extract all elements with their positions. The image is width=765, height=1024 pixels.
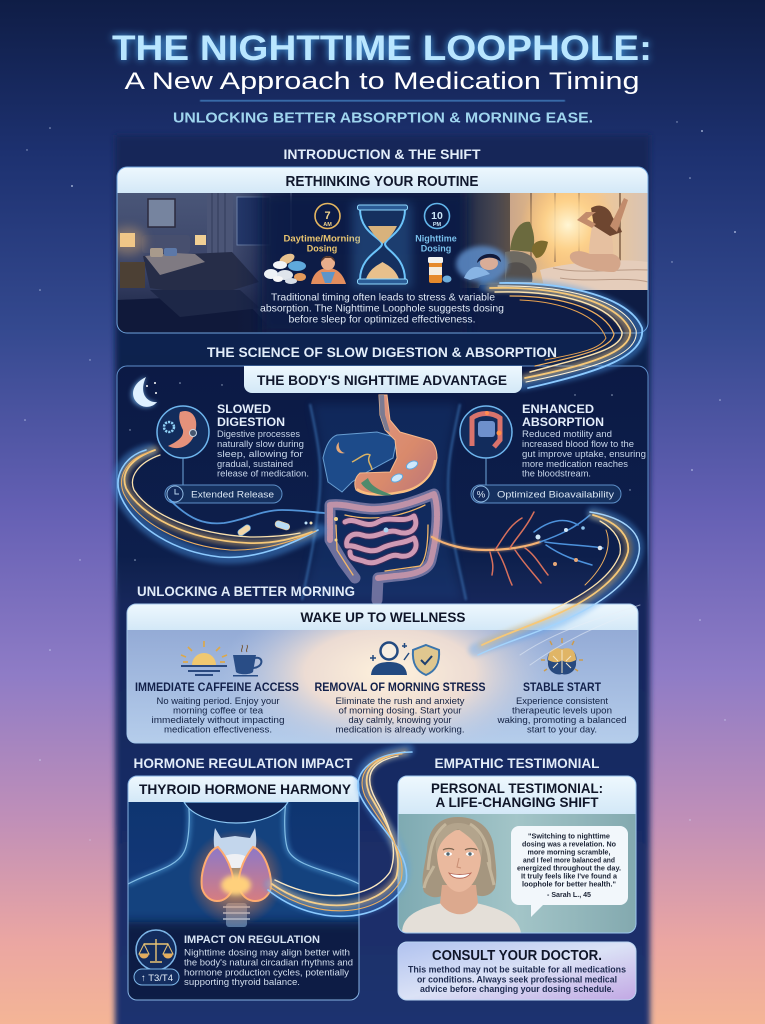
- icon: sleeping person: [456, 246, 508, 282]
- pill: optimized bioavailability: Optimized Bioavailability: [497, 490, 614, 500]
- anatomy: liver: [323, 432, 397, 492]
- body: slowed digestion: [217, 429, 309, 478]
- body silhouette: [302, 404, 466, 600]
- illustration: bedroom: [110, 193, 292, 333]
- energy swirl: thyroid to testimonial: [268, 750, 412, 916]
- speech bubble: and I feel more balanced and: [523, 856, 615, 864]
- body: impact on regulation: [184, 948, 353, 988]
- icon: pile of pills: [264, 252, 306, 284]
- panel: rethinking your routine: [110, 167, 648, 333]
- panel header: THYROID HORMONE HARMONY: [139, 781, 352, 797]
- panel: consult your doctor: [398, 942, 636, 1000]
- illustration: thyroid gland: [188, 828, 284, 927]
- item: stable start: STABLE START: [523, 682, 601, 694]
- body: impact on regulation: the body's natural circadian rhythms and: [184, 958, 353, 968]
- pill: extended release: Extended Release: [191, 490, 274, 500]
- section label: science: THE SCIENCE OF SLOW DIGESTION & ABSORPTION: [207, 345, 557, 360]
- pill: extended release: [165, 485, 282, 503]
- speech bubble: "Switching to nighttime: [528, 832, 610, 840]
- icon: calm person: [370, 642, 409, 675]
- intro body text: [260, 292, 504, 326]
- panel: consult your doctor: CONSULT YOUR DOCTOR.: [432, 948, 602, 964]
- label: nighttime dosing: [415, 234, 457, 254]
- slowed digestion callout: [157, 404, 309, 503]
- label: nighttime dosing: Nighttime: [415, 234, 457, 244]
- section label: unlocking a better morning: UNLOCKING A BETTER MORNING: [137, 584, 355, 599]
- icon: coffee cup: [233, 645, 261, 676]
- item: removal of morning stress: of morning dosing. Start your: [338, 706, 462, 716]
- icon: 10 pm clock: PM: [433, 222, 442, 228]
- body: enhanced absorption: [522, 429, 646, 478]
- vessels: [432, 512, 603, 585]
- tagline: UNLOCKING BETTER ABSORPTION & MORNING EASE.: [173, 110, 593, 126]
- dark floor under the swirl: [478, 284, 574, 290]
- icon: shield with check: [413, 645, 439, 675]
- panel: consult your doctor: advice before changing your dosing schedule.: [420, 984, 614, 994]
- body: slowed digestion: Digestive processes: [217, 429, 301, 439]
- body: impact on regulation: hormone production cycles, potentially: [184, 968, 349, 978]
- illustration: sunrise bedroom: [462, 193, 648, 290]
- item: stable start: [496, 682, 626, 734]
- panel header: PERSONAL TESTIMONIAL:: [431, 780, 603, 796]
- icon: 10 pm clock: 10: [431, 210, 443, 222]
- section label: empathic testimonial: EMPATHIC TESTIMONIAL: [434, 756, 600, 771]
- enhanced absorption callout: [460, 404, 646, 503]
- connector: [182, 458, 184, 485]
- photo: smiling woman: [402, 817, 521, 933]
- body: slowed digestion: release of medication.: [217, 468, 309, 478]
- item: stable start: Experience consistent: [516, 696, 608, 706]
- panel header: WAKE UP TO WELLNESS: [300, 609, 466, 625]
- heading: slowed digestion: [217, 404, 285, 429]
- item: removal of morning stress: medication is already working.: [336, 724, 464, 734]
- intro body text: Traditional timing often leads to stress & variable: [271, 292, 495, 304]
- item: immediate caffeine access: immediately without impacting: [152, 715, 284, 725]
- section label: hormone regulation impact: HORMONE REGULATION IMPACT: [134, 756, 353, 771]
- icon: crescent moon: [131, 377, 157, 407]
- panel border: [117, 167, 648, 333]
- body: enhanced absorption: gut improve uptake, ensuring: [522, 449, 646, 459]
- item: removal of morning stress: REMOVAL OF MORNING STRESS: [314, 682, 486, 694]
- heading: enhanced absorption: [522, 404, 604, 429]
- heading: enhanced absorption: ABSORPTION: [522, 417, 604, 429]
- intro body text: before sleep for optimized effectiveness.: [288, 314, 476, 326]
- panel header: [128, 776, 359, 802]
- pill: T3/T4: [134, 969, 179, 985]
- panel header: [398, 776, 636, 814]
- item: stable start: start to your day.: [527, 724, 597, 734]
- icon: 10 pm clock: [424, 204, 450, 228]
- body: impact on regulation: supporting thyroid balance.: [184, 977, 300, 988]
- body: impact on regulation: Nighttime dosing may align better with: [184, 948, 350, 958]
- icon: intestine: [460, 406, 512, 458]
- section label: introduction: INTRODUCTION & THE SHIFT: [284, 147, 481, 162]
- label: daytime dosing: [284, 234, 360, 254]
- starfield: [24, 121, 736, 841]
- heading: slowed digestion: DIGESTION: [217, 417, 285, 429]
- icon: stomach with gear: [157, 406, 209, 458]
- section header pill: the body's nighttime advantage: [244, 366, 522, 393]
- item: stable start: waking, promoting a balanced: [496, 715, 626, 725]
- item: removal of morning stress: [314, 682, 486, 734]
- item: immediate caffeine access: [135, 682, 299, 734]
- body: enhanced absorption: the bloodstream.: [522, 468, 591, 478]
- panel header: RETHINKING YOUR ROUTINE: [286, 174, 479, 190]
- icon: pill bottle: [428, 257, 452, 283]
- connector: [485, 458, 487, 485]
- item: stable start: therapeutic levels upon: [512, 706, 612, 716]
- panel: body's nighttime advantage: [117, 366, 648, 604]
- body: slowed digestion: sleep, allowing for: [217, 449, 303, 459]
- illustration: neck: [128, 802, 358, 956]
- illustration: central shade: [262, 193, 467, 333]
- panel: thyroid hormone harmony: [120, 776, 370, 1007]
- speech bubble: It truly feels like I've found a: [521, 872, 618, 880]
- speech bubble: dosing was a revelation. No: [522, 840, 617, 848]
- speech bubble: energized throughout the day.: [517, 864, 621, 872]
- title divider: [200, 100, 565, 102]
- item: immediate caffeine access: IMMEDIATE CAFFEINE ACCESS: [135, 682, 299, 694]
- panel header: [127, 604, 638, 630]
- heading: enhanced absorption: ENHANCED: [522, 404, 594, 416]
- heading: slowed digestion: SLOWED: [217, 404, 271, 416]
- label: daytime dosing: Daytime/Morning: [284, 234, 360, 244]
- title: subtitle: A New Approach to Medication Timing: [124, 68, 640, 95]
- energy swirl: left with capsules: [118, 450, 324, 557]
- panel header: A LIFE-CHANGING SHIFT: [436, 794, 599, 810]
- anatomy: esophagus and stomach: [355, 395, 437, 495]
- title block: [112, 29, 652, 126]
- energy swirl: right into morning panel: [475, 512, 640, 665]
- item: immediate caffeine access: medication effectiveness.: [164, 724, 272, 734]
- body: enhanced absorption: increased blood flow to the: [522, 439, 634, 449]
- heading: impact on regulation: IMPACT ON REGULATION: [184, 934, 320, 946]
- icon: 7 am clock: [315, 204, 340, 228]
- pill: optimized bioavailability: [471, 485, 621, 503]
- item: immediate caffeine access: morning coffee or tea: [173, 706, 264, 716]
- label: nighttime dosing: Dosing: [421, 244, 451, 254]
- speech bubble: - Sarah L., 45: [547, 890, 591, 899]
- body: enhanced absorption: more medication reaches: [522, 459, 629, 469]
- pill: optimized bioavailability: %: [477, 490, 486, 500]
- panel: consult your doctor: This method may not be suitable for all medications: [408, 964, 626, 974]
- icon: brain: [541, 638, 583, 674]
- item: immediate caffeine access: No waiting period. Enjoy your: [156, 696, 280, 706]
- intro body text: absorption. The Nighttime Loophole suggests dosing: [260, 304, 504, 314]
- item: removal of morning stress: Eliminate the rush and anxiety: [336, 696, 465, 706]
- speech bubble: loophole for better health.": [522, 880, 616, 888]
- panel: wake up to wellness: [126, 604, 638, 744]
- pill: T3/T4: ↑ T3/T4: [141, 973, 173, 984]
- energy swirl: upper right: [485, 283, 642, 388]
- item: removal of morning stress: day calmly, knowing your: [348, 715, 452, 725]
- speech bubble: more morning scramble,: [528, 848, 610, 856]
- panel: personal testimonial: [398, 776, 636, 933]
- label: daytime dosing: Dosing: [307, 244, 337, 254]
- title: main: THE NIGHTTIME LOOPHOLE:: [112, 29, 652, 68]
- figure: stretching woman: [570, 198, 628, 272]
- icon: 7 am clock: AM: [323, 222, 332, 228]
- speech bubble: [511, 826, 628, 917]
- capsules: [237, 520, 312, 537]
- icon: sunrise: [181, 641, 227, 676]
- central dark column: [115, 135, 650, 1024]
- small stars: [129, 382, 631, 591]
- body: enhanced absorption: Reduced motility and: [522, 429, 612, 439]
- anatomy: intestines: [330, 494, 437, 600]
- body: slowed digestion: naturally slow during: [217, 439, 304, 449]
- panel: consult your doctor: or conditions. Always seek professional medical: [417, 974, 617, 984]
- panel header: [117, 167, 648, 193]
- icon: balance scale: [136, 930, 176, 970]
- body: slowed digestion: gradual, sustained: [217, 459, 293, 469]
- icon: 7 am clock: 7: [324, 210, 331, 222]
- section header pill: the body's nighttime advantage: THE BODY'S NIGHTTIME ADVANTAGE: [257, 372, 507, 388]
- icon: stressed person: [311, 256, 346, 284]
- icon: hourglass: [352, 203, 412, 289]
